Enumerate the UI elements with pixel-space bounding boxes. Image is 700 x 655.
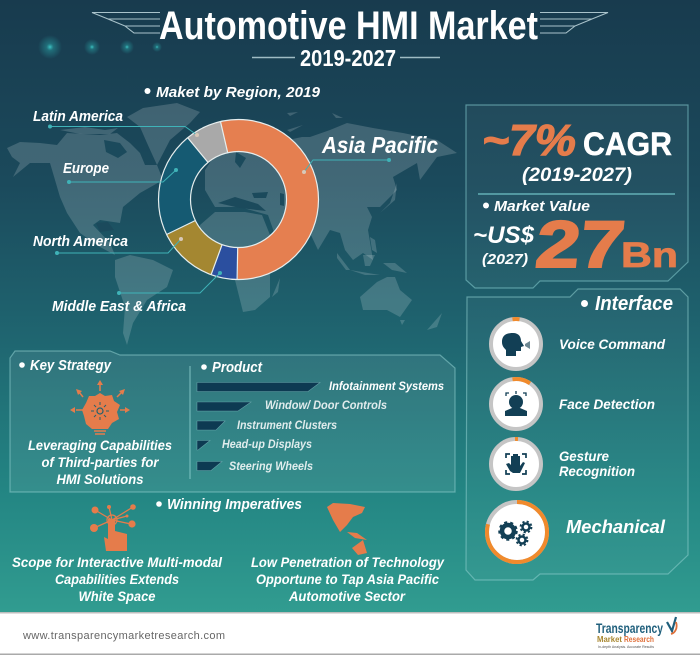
key strategy text <box>28 438 172 487</box>
website url: www.transparencymarketresearch.com <box>22 630 225 642</box>
market value unit: Bn <box>621 236 678 275</box>
key strategy text: Leveraging Capabilities <box>28 438 172 453</box>
label: Middle East and Africa: Middle East & Africa <box>52 299 186 315</box>
label: mechanical: Mechanical <box>566 517 666 537</box>
imperative text: multi-modal: White Space <box>78 589 156 604</box>
panel frame <box>10 351 455 492</box>
imperative text: multi-modal: Capabilities Extends <box>55 572 179 587</box>
divider <box>189 366 191 479</box>
leader lines <box>48 124 391 295</box>
label: Asia Pacific: Asia Pacific <box>321 132 438 158</box>
decorative stars <box>38 35 162 59</box>
CAGR label: CAGR <box>583 126 672 162</box>
label: voice command: Voice Command <box>559 336 665 352</box>
region heading: Maket by Region, 2019 <box>156 84 321 101</box>
footer <box>0 612 700 655</box>
panel frame <box>466 105 688 288</box>
label: Europe: Europe <box>63 161 109 177</box>
key strategy text: of Third-parties for <box>42 455 159 470</box>
panel: CAGR and market value <box>466 105 688 288</box>
label: gesture recognition: Gesture <box>559 448 609 464</box>
icon: gesture recognition <box>491 439 541 489</box>
bar: window and door controls <box>197 402 251 411</box>
logo: Transparency <box>596 621 663 636</box>
year rules <box>252 56 440 58</box>
logo <box>596 617 677 649</box>
label: North America: North America <box>33 234 128 250</box>
title: Automotive HMI Market <box>159 4 538 48</box>
product label: steering: Steering Wheels <box>229 459 313 473</box>
icon: mechanical gears <box>487 502 547 562</box>
icon: touch hand network <box>90 504 136 551</box>
label: Latin America: Latin America <box>33 109 123 125</box>
panel: market by region <box>33 84 438 315</box>
winning imperatives heading: Winning Imperatives <box>167 497 302 513</box>
bar: infotainment systems <box>197 382 320 392</box>
CAGR value: ~7% <box>482 116 576 165</box>
bar: instrument clusters <box>197 421 225 430</box>
imperative text: multi-modal <box>12 555 222 604</box>
icon: voice command <box>491 319 541 369</box>
year range: 2019-2027 <box>300 45 396 71</box>
label: face detection: Face Detection <box>559 396 655 412</box>
imperative text: multi-modal: Scope for Interactive Multi-modal <box>12 555 222 570</box>
CAGR period: (2019-2027) <box>522 165 632 186</box>
value year: (2027) <box>482 251 528 268</box>
bar: head-up displays <box>197 440 210 450</box>
key strategy heading: Key Strategy <box>30 358 112 374</box>
label: gesture recognition: Recognition <box>559 463 635 479</box>
panel: interface <box>466 289 688 580</box>
section: winning imperatives <box>12 497 445 604</box>
imperative text: technology: Opportune to Tap Asia Pacific <box>256 572 439 587</box>
market value number: 27 <box>532 208 628 282</box>
logo: In-depth Analysis. Accurate Results <box>598 645 654 649</box>
bar: steering wheels <box>197 462 222 470</box>
product label: instrument: Instrument Clusters <box>237 418 337 432</box>
market value heading: Market Value <box>494 198 590 215</box>
donut chart <box>148 109 329 290</box>
icon: asia pacific map <box>327 503 367 555</box>
product label: head-up: Head-up Displays <box>222 437 312 451</box>
currency: ~US$ <box>473 222 535 249</box>
panel frame <box>466 289 688 580</box>
bar chart: product <box>197 382 320 470</box>
title wings <box>92 12 608 33</box>
logo: Research <box>624 635 654 644</box>
interface heading: Interface <box>595 293 673 315</box>
title block <box>92 4 608 71</box>
label: gesture recognition <box>559 448 635 479</box>
inland seas <box>96 140 284 232</box>
imperative text: technology <box>251 555 445 604</box>
imperative text: technology: Automotive Sector <box>288 589 406 604</box>
product heading: Product <box>212 360 263 376</box>
icon: strategy head with bulb <box>70 380 130 434</box>
divider <box>478 193 675 195</box>
key strategy text: HMI Solutions <box>56 472 144 487</box>
panel: key strategy and product <box>10 351 455 492</box>
product label: window door: Window/ Door Controls <box>265 398 387 412</box>
imperative text: technology: Low Penetration of Technology <box>251 555 445 570</box>
icon: face detection <box>491 379 541 429</box>
product label: infotainment: Infotainment Systems <box>329 379 444 393</box>
world map <box>7 103 457 345</box>
logo: Market <box>597 635 622 644</box>
